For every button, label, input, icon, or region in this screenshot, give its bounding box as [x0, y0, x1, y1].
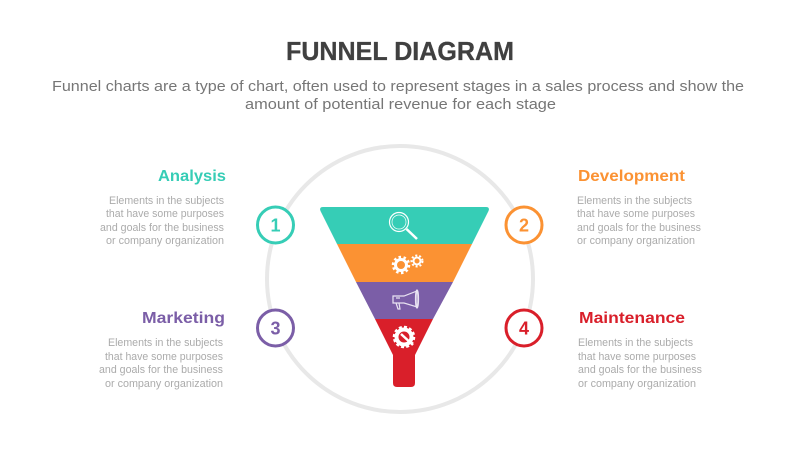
text block: development [577, 195, 701, 247]
text block: maintenance: Elements in the subjects [578, 337, 693, 349]
icon: gears [393, 256, 422, 273]
badge 3 [258, 310, 294, 346]
badge 4 [506, 310, 542, 346]
text block: analysis: and goals for the business [100, 222, 224, 234]
heading: marketing: Marketing [142, 310, 225, 327]
heading: analysis: Analysis [158, 168, 226, 185]
text block: maintenance: and goals for the business [578, 364, 702, 376]
text block: development: or company organization [577, 235, 695, 247]
text block: development: Elements in the subjects [577, 195, 692, 207]
text block: marketing: or company organization [105, 378, 223, 390]
text block: development: and goals for the business [577, 222, 701, 234]
text block: marketing: and goals for the business [99, 364, 223, 376]
icon: gear and wrench [394, 327, 414, 347]
text block: maintenance: or company organization [578, 378, 696, 390]
text block: development: that have some purposes [577, 208, 695, 220]
text block: analysis: that have some purposes [106, 208, 224, 220]
text block: marketing: that have some purposes [105, 351, 223, 363]
badge 4: 4 [519, 318, 529, 338]
badge 1 [258, 207, 294, 243]
text block: analysis [100, 195, 224, 247]
title: FUNNEL DIAGRAM [286, 36, 514, 66]
text block: marketing [99, 337, 223, 390]
badge 2 [506, 207, 542, 243]
text block: maintenance: that have some purposes [578, 351, 696, 363]
heading: development: Development [578, 168, 685, 185]
badge 1: 1 [270, 216, 281, 236]
subtitle [52, 78, 744, 113]
badge 3: 3 [270, 318, 281, 338]
heading: maintenance: Maintenance [579, 310, 685, 327]
subtitle: amount of potential revenue for each stage [245, 96, 556, 113]
funnel band: maintenance [375, 319, 433, 387]
text block: analysis: Elements in the subjects [109, 195, 224, 207]
funnel band: development [337, 244, 472, 282]
text block: marketing: Elements in the subjects [108, 337, 223, 349]
text block: analysis: or company organization [106, 235, 224, 247]
background ring [267, 146, 533, 412]
funnel [320, 207, 489, 387]
subtitle: Funnel charts are a type of chart, often used to represent stages in a sales process and show the [52, 78, 744, 95]
badge 2: 2 [519, 216, 529, 236]
icon: magnifying glass [390, 212, 417, 239]
text block: maintenance [578, 337, 702, 390]
funnel band: marketing [356, 282, 453, 319]
icon: megaphone [393, 290, 418, 309]
funnel band: analysis [320, 207, 489, 244]
